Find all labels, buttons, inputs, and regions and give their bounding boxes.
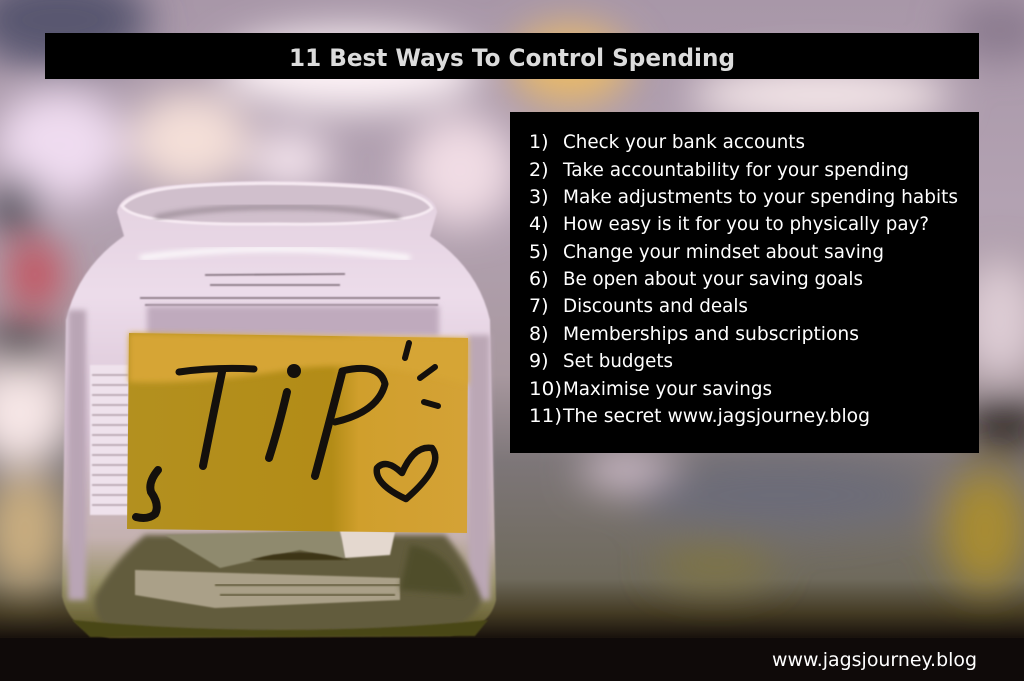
website footer text: www.jagsjourney.blog	[772, 649, 977, 671]
tip 2: 2)	[529, 159, 549, 181]
glass jar with money	[62, 181, 496, 638]
tip 7: Discounts and deals	[563, 295, 748, 317]
tip 1: 1)	[529, 131, 549, 153]
tip 4: How easy is it for you to physically pay?	[563, 213, 929, 235]
rim shadow	[155, 207, 400, 218]
jar shoulder lines	[140, 249, 410, 258]
money at bottom	[95, 535, 482, 634]
title text: 11 Best Ways To Control Spending	[289, 44, 735, 72]
tip 1: Check your bank accounts	[563, 131, 805, 153]
dollar sign	[136, 470, 158, 518]
tip 11: 11)	[529, 405, 562, 427]
jar side ribs	[68, 310, 490, 600]
tip 2: Take accountability for your spending	[562, 159, 909, 181]
jar neck rim	[122, 183, 432, 224]
title banner	[45, 33, 979, 79]
tip 10: 10)	[529, 378, 562, 400]
tip 5: Change your mindset about saving	[563, 241, 884, 263]
lighter upper band of label	[129, 333, 468, 385]
heart	[377, 448, 435, 499]
yellow TIP label on jar	[127, 333, 468, 533]
panel: list of tips	[510, 112, 979, 453]
tip 11: The secret www.jagsjourney.blog	[562, 405, 870, 427]
handwritten TIP	[179, 368, 385, 476]
tip 3: Make adjustments to your spending habits	[563, 186, 958, 208]
tip 8: Memberships and subscriptions	[563, 323, 859, 345]
tip 8: 8)	[529, 323, 549, 345]
tip 5: 5)	[529, 241, 549, 263]
tip 9: 9)	[529, 350, 549, 372]
tip 7: 7)	[529, 295, 549, 317]
dot of the i	[287, 364, 301, 378]
window panel behind label	[147, 306, 439, 336]
jar body	[62, 181, 496, 638]
tip 3: 3)	[529, 186, 549, 208]
tip 10: Maximise your savings	[563, 378, 772, 400]
tip 6: 6)	[529, 268, 549, 290]
tip 9: Set budgets	[563, 350, 673, 372]
ribbed texture left of label	[90, 365, 128, 515]
sparkle marks	[405, 343, 438, 406]
tip 6: Be open about your saving goals	[563, 268, 863, 290]
tip 4: 4)	[529, 213, 549, 235]
